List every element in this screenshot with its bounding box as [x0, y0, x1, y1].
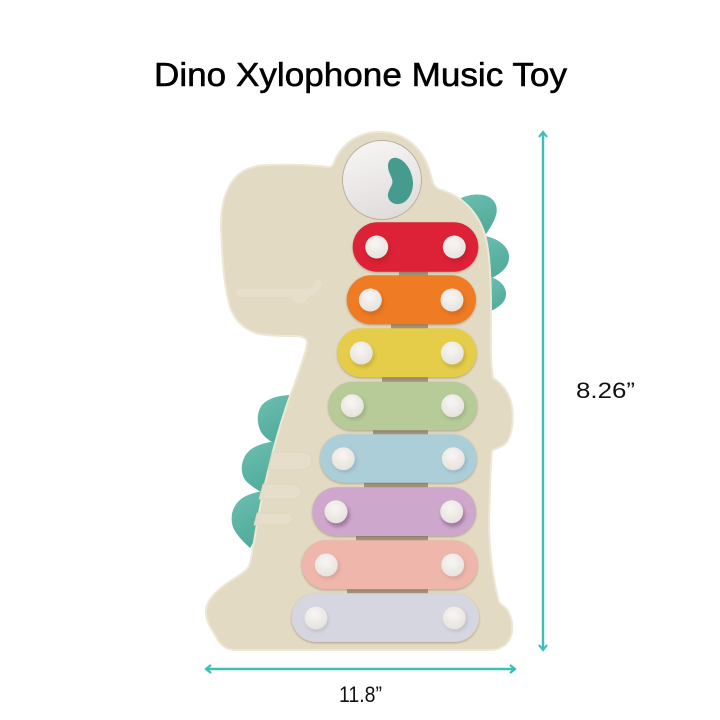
bar 6: purple [312, 487, 476, 536]
title: Dino Xylophone Music Toy [154, 56, 568, 93]
pupil [388, 158, 413, 204]
label: height: 8.26” [576, 378, 635, 403]
label: width: 11.8” [339, 682, 382, 707]
bar 7: pink [302, 540, 478, 589]
bar 5: blue [320, 434, 477, 483]
claws: three raised strips [254, 452, 312, 525]
rails between the bars [347, 270, 428, 594]
arrow: width dimension [206, 665, 515, 673]
bar 8: lavender grey [292, 593, 479, 642]
eye [342, 140, 422, 220]
mouth line [240, 284, 318, 293]
bar 2: orange [347, 275, 476, 324]
tail spines: teal plates on the back [232, 395, 296, 548]
bar 4: green [328, 382, 477, 430]
bar 3: yellow [337, 328, 477, 377]
body silhouette [206, 132, 513, 650]
bar 1: red [353, 222, 478, 272]
dinosaur xylophone toy [206, 132, 513, 650]
back spines: teal plates on the neck [461, 194, 509, 311]
arrow: height dimension [539, 132, 547, 650]
